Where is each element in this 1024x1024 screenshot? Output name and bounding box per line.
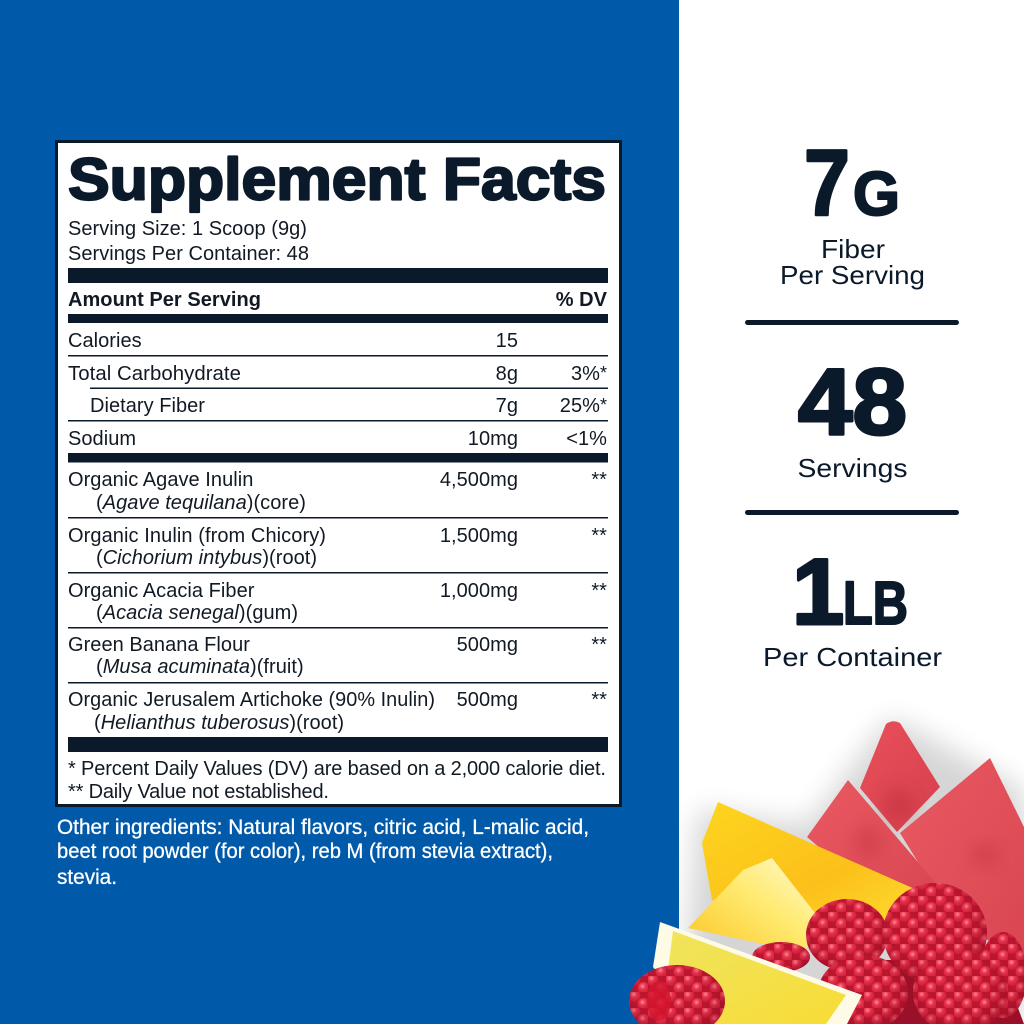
- row: organic inulin: Organic Inulin (from Chicory): [68, 525, 326, 547]
- other ingredients text: beet root powder (for color), reb M (from stevia extract),: [57, 840, 553, 863]
- row: dietary fiber: 25%: [560, 395, 600, 417]
- row: calories: 15: [496, 330, 518, 352]
- stat: fiber per serving: Per Serving: [780, 260, 925, 290]
- row: sodium: Sodium: [68, 428, 136, 450]
- row: total carbohydrate: 3%: [571, 363, 600, 385]
- pineapple front wedge: [688, 858, 815, 953]
- stat: fiber per serving: [780, 130, 925, 290]
- raspberries behind lemon: [752, 883, 1024, 1024]
- stat: per container: [763, 539, 942, 672]
- stat: fiber per serving: 7: [804, 130, 850, 235]
- row: organic jerusalem artichoke: 500mg: [457, 689, 518, 711]
- row: total carbohydrate: *: [600, 363, 607, 383]
- watermelon right slice: [900, 758, 1024, 953]
- row: organic agave inulin: Organic Agave Inulin: [68, 469, 253, 491]
- divider: [745, 510, 959, 515]
- row: organic acacia fiber: [68, 580, 607, 624]
- other ingredients text: stevia.: [57, 866, 117, 889]
- footnotes: ** Daily Value not established.: [68, 781, 329, 803]
- stat: servings: 48: [798, 349, 907, 454]
- row: organic jerusalem artichoke: Organic Jerusalem Artichoke (90% Inulin): [68, 689, 435, 711]
- serving information: Serving Size: 1 Scoop (9g): [68, 218, 307, 240]
- icon: fruit cluster: [629, 721, 1024, 1024]
- row: organic acacia fiber: **: [591, 580, 607, 602]
- row: dietary fiber: Dietary Fiber: [90, 395, 205, 417]
- thick bar bottom: [68, 737, 608, 752]
- row: green banana flour: **: [591, 634, 607, 656]
- row: green banana flour: Green Banana Flour: [68, 634, 250, 656]
- stat: per container: 1: [792, 539, 844, 644]
- row: organic inulin: [68, 525, 607, 569]
- footnotes: * Percent Daily Values (DV) are based on a 2,000 calorie diet.: [68, 758, 606, 780]
- row: organic agave inulin: (Agave tequilana)(core): [96, 492, 306, 514]
- row: dietary fiber: *: [600, 395, 607, 415]
- row: organic inulin: **: [591, 525, 607, 547]
- white background panel: [679, 0, 1024, 1024]
- row: total carbohydrate: [68, 363, 607, 385]
- row: calories: Calories: [68, 330, 142, 352]
- row: organic inulin: (Cichorium intybus)(root): [96, 547, 317, 569]
- other ingredients text: [57, 816, 589, 889]
- row: green banana flour: (Musa acuminata)(fruit): [96, 656, 304, 678]
- serving information: [68, 218, 309, 265]
- row: organic acacia fiber: Organic Acacia Fiber: [68, 580, 255, 602]
- pineapple back wedge: [702, 802, 917, 925]
- row: organic jerusalem artichoke: (Helianthus tuberosus)(root): [94, 712, 344, 734]
- row: organic agave inulin: 4,500mg: [440, 469, 518, 491]
- row: organic jerusalem artichoke: [68, 689, 607, 734]
- row: organic jerusalem artichoke: **: [591, 689, 607, 711]
- row: green banana flour: [68, 634, 607, 678]
- row: organic acacia fiber: (Acacia senegal)(gum): [96, 602, 298, 624]
- row: total carbohydrate: 8g: [496, 363, 518, 385]
- fruit shadow: [680, 722, 1024, 1024]
- serving information: Servings Per Container: 48: [68, 243, 309, 265]
- panel: supplement facts label: [56, 142, 620, 806]
- row: dietary fiber: [90, 395, 607, 417]
- row: sodium: <1%: [566, 428, 607, 450]
- stat: per container: LB: [843, 569, 908, 637]
- watermelon back slice: [860, 721, 940, 832]
- row: dietary fiber: 7g: [496, 395, 518, 417]
- title: Supplement Facts: [68, 146, 606, 212]
- stat: servings: Servings: [798, 453, 908, 483]
- stat: fiber per serving: Fiber: [821, 234, 885, 264]
- other ingredients text: Other ingredients: Natural flavors, citric acid, L-malic acid,: [57, 816, 589, 839]
- row: sodium: [68, 428, 607, 450]
- row: organic agave inulin: [68, 469, 607, 514]
- thick bar top: [68, 268, 608, 283]
- row: organic acacia fiber: 1,000mg: [440, 580, 518, 602]
- raspberry front left: [629, 965, 725, 1024]
- stat: fiber per serving: G: [853, 160, 900, 229]
- lemon wedge: [653, 922, 862, 1024]
- table header: Amount Per Serving: [68, 289, 261, 311]
- row: sodium: 10mg: [468, 428, 518, 450]
- footnotes: [68, 758, 606, 803]
- table header: [68, 289, 608, 311]
- row: green banana flour: 500mg: [457, 634, 518, 656]
- divider: [745, 320, 959, 325]
- stat: per container: Per Container: [763, 642, 942, 672]
- row: organic inulin: 1,500mg: [440, 525, 518, 547]
- watermelon left slice: [807, 780, 935, 900]
- row: total carbohydrate: Total Carbohydrate: [68, 363, 241, 385]
- row: organic agave inulin: **: [591, 469, 607, 491]
- blue background panel: [0, 0, 679, 1024]
- row: calories: [68, 330, 518, 352]
- table header: % DV: [556, 289, 608, 311]
